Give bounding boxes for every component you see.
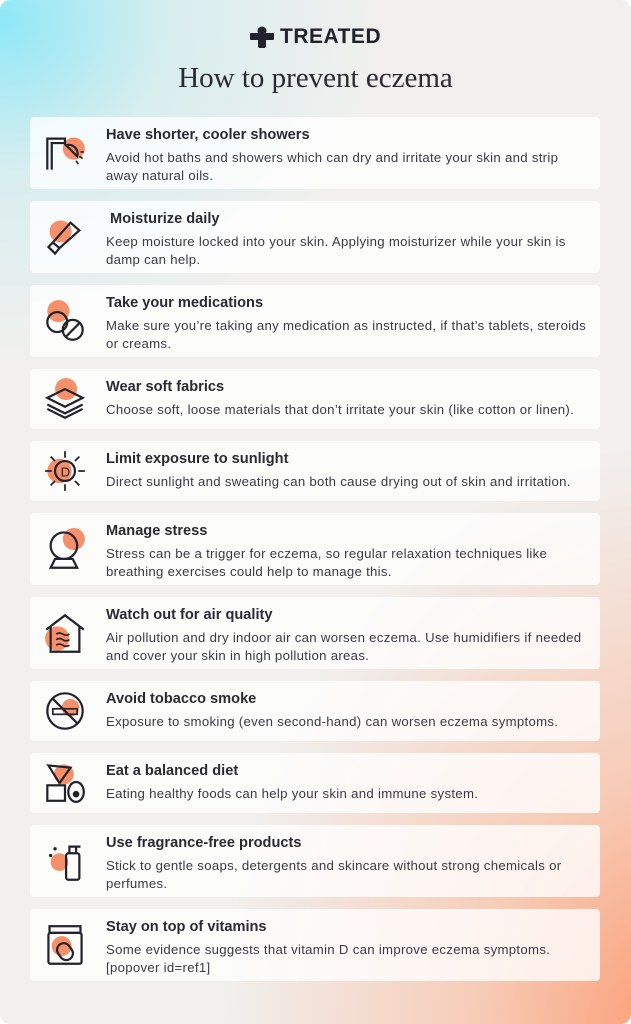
card: fragrance-free: Stick to gentle soaps, detergents and skincare without strong chemicals or perfumes. xyxy=(106,858,561,891)
card: sunlight: Direct sunlight and sweating can both cause drying out of skin and irritation. xyxy=(106,474,571,489)
icon: vitamin jar xyxy=(47,925,83,965)
card: vitamins: Stay on top of vitamins xyxy=(106,919,267,935)
title: How to prevent eczema xyxy=(178,62,453,94)
card: stress: Manage stress xyxy=(106,523,207,539)
logo: TREATED xyxy=(280,25,381,48)
card: fragrance-free: Use fragrance-free products xyxy=(106,835,301,851)
card: stress xyxy=(30,513,600,585)
card: air quality: Air pollution and dry indoor air can worsen eczema. Use humidifiers if needed and cover your skin in high pollution areas. xyxy=(106,630,581,663)
card: fabrics: Wear soft fabrics xyxy=(106,379,224,395)
card: showers: Avoid hot baths and showers which can dry and irritate your skin and strip away natural oils. xyxy=(106,150,558,183)
icon: tube xyxy=(46,220,81,256)
card: tobacco: Exposure to smoking (even second-hand) can worsen eczema symptoms. xyxy=(106,714,558,729)
card: diet xyxy=(30,753,600,813)
card: showers xyxy=(30,117,600,189)
card: moisturize xyxy=(30,201,600,273)
card: diet: Eating healthy foods can help your skin and immune system. xyxy=(106,786,478,801)
card: diet: Eat a balanced diet xyxy=(106,763,238,779)
card: showers: Have shorter, cooler showers xyxy=(106,127,310,143)
card: moisturize: Moisturize daily xyxy=(110,211,220,227)
card: tobacco xyxy=(30,681,600,741)
icon: pills xyxy=(46,300,84,341)
card: fragrance-free xyxy=(30,825,600,897)
card: sunlight: Limit exposure to sunlight xyxy=(106,451,288,467)
card: vitamins: Some evidence suggests that vitamin D can improve eczema symptoms. [popover id=ref1] xyxy=(106,942,550,975)
card: tobacco: Avoid tobacco smoke xyxy=(106,691,256,707)
card: moisturize: Keep moisture locked into your skin. Applying moisturizer while your skin is damp can help. xyxy=(106,234,566,267)
card: air quality xyxy=(30,597,600,669)
icon: bottle xyxy=(49,846,80,881)
card: fabrics: Choose soft, loose materials that don’t irritate your skin (like cotton or linen). xyxy=(106,402,574,417)
icon: shower xyxy=(46,138,85,170)
card: vitamins xyxy=(30,909,600,981)
card: medications: Take your medications xyxy=(106,295,263,311)
card: stress: Stress can be a trigger for eczema, so regular relaxation techniques like breathing exercises could help to manage this. xyxy=(106,546,547,579)
icon: house xyxy=(45,614,84,653)
icon: sun D: D xyxy=(61,465,70,480)
icon: head xyxy=(48,528,85,569)
icon: sun D xyxy=(45,451,85,491)
icon: fabric layers xyxy=(44,378,85,419)
card: air quality: Watch out for air quality xyxy=(106,607,272,623)
card: medications xyxy=(30,285,600,357)
card: fabrics xyxy=(30,369,600,429)
icon: no smoking xyxy=(46,692,84,730)
icon: food xyxy=(46,764,85,803)
card: medications: Make sure you’re taking any medication as instructed, if that’s tablets, steroids or creams. xyxy=(106,318,586,351)
card: sunlight xyxy=(30,441,600,501)
